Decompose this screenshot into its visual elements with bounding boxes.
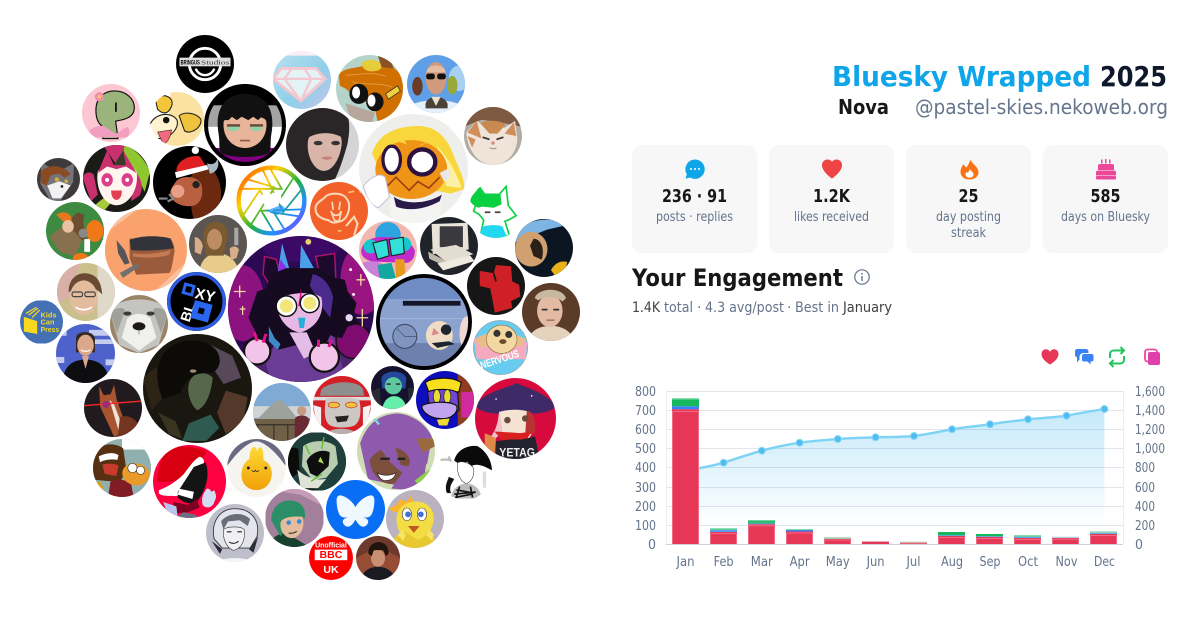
avatar: Bringus Studios logo: BRINGUS <box>181 60 200 67</box>
left axis labels: 300 <box>635 481 656 496</box>
bar: Oct <box>1014 535 1041 544</box>
avatar: rainbow camera aperture heart <box>236 166 307 236</box>
heading: Your Engagement: Your Engagement <box>631 264 843 292</box>
avatar: orange and white cat <box>464 107 522 165</box>
avatar: man with cap portrait <box>522 283 580 341</box>
right axis labels: 600 <box>1135 481 1155 496</box>
month labels: Aug <box>941 555 963 570</box>
avatar: pastel diamond <box>273 51 331 109</box>
avatar: red shape on black <box>467 257 525 315</box>
bar: Apr <box>786 529 813 544</box>
engagement summary text: total <box>664 300 693 316</box>
cumulative area <box>686 409 1104 544</box>
avatar: Kids Can Press logo: Press <box>41 325 59 334</box>
avatar: green haired character <box>265 489 324 547</box>
avatar: green skinned person <box>371 366 414 409</box>
avatar: Unofficial BBC UK: UK <box>323 564 339 576</box>
bar: Jul <box>900 542 927 544</box>
left axis labels: 800 <box>635 385 656 400</box>
avatar: purple dog with yellow hat <box>416 371 474 429</box>
user name and handle: @pastel-skies.nekoweb.org <box>915 95 1168 119</box>
icon: legend replies <box>1075 349 1094 364</box>
avatar: yellow bunny blob <box>227 439 286 497</box>
avatar: teal creature with diamond glasses <box>359 221 417 279</box>
month labels: Feb <box>714 555 734 570</box>
right axis labels: 1,200 <box>1135 423 1165 438</box>
icon: chat bubble <box>685 159 705 179</box>
avatar: cat girl on green <box>46 202 104 260</box>
avatar: space station porthole <box>376 274 472 370</box>
panel: posts and replies: 236 · 91 <box>662 186 727 207</box>
legend icons <box>1041 347 1160 367</box>
panel: day posting streak: day posting <box>936 210 1001 225</box>
engagement summary text <box>632 300 892 316</box>
stacked bars <box>672 398 1117 544</box>
avatar: horse with laser eyes <box>84 379 142 437</box>
month labels: Apr <box>790 555 810 570</box>
panel: day posting streak: streak <box>951 226 986 241</box>
month labels: Jun <box>866 555 885 570</box>
title: 2025 <box>1100 60 1167 93</box>
right axis labels <box>1135 385 1165 553</box>
left axis labels: 400 <box>635 461 656 476</box>
avatar: santa hat bull <box>153 146 226 219</box>
month labels: Oct <box>1018 555 1038 570</box>
panel: posts and replies <box>632 145 757 253</box>
icon: birthday cake <box>1096 159 1116 180</box>
avatar: main purple cat girl <box>228 236 374 382</box>
panel: days on Bluesky: 585 <box>1090 186 1120 207</box>
left axis labels: 0 <box>648 538 656 553</box>
right axis labels: 800 <box>1135 461 1155 476</box>
grid lines <box>666 391 1124 544</box>
avatar: Bloxy blue logo <box>167 272 226 331</box>
left axis labels <box>635 385 656 553</box>
icon: legend reposts <box>1110 347 1124 367</box>
engagement summary text: · <box>697 300 701 316</box>
icon: heart <box>822 159 842 178</box>
bar: Jan <box>672 398 699 544</box>
engagement summary text: January <box>842 300 892 316</box>
avatar: purple hair with green outline <box>357 412 435 490</box>
user name and handle: Nova <box>838 95 889 119</box>
title: Bluesky Wrapped <box>832 60 1091 93</box>
icon: legend like heart <box>1041 349 1059 364</box>
right axis labels: 0 <box>1135 538 1143 553</box>
avatar: Unofficial BBC UK: BBC <box>320 550 342 561</box>
avatar: green turtle on pink <box>82 84 140 142</box>
avatar: Bluesky butterfly <box>326 480 385 539</box>
avatar: woman in black at press wall <box>56 324 115 383</box>
avatar: Bringus Studios logo <box>176 35 234 93</box>
avatar bubble cloud <box>20 35 580 580</box>
avatar: peach satchel with sword <box>105 209 187 291</box>
avatar: anime girl with pink green hair <box>83 145 150 212</box>
month labels: Dec <box>1094 555 1115 570</box>
avatar: woman with glasses <box>57 263 115 321</box>
bar: May <box>824 537 851 544</box>
avatar: black and white manga sketch <box>438 443 492 500</box>
avatar: red and white robot demon <box>313 376 371 434</box>
panel: posts and replies: posts · replies <box>656 210 733 225</box>
avatar: brown mouth and Garfield <box>93 439 151 497</box>
avatar: Bloxy blue logo: XY <box>193 285 217 306</box>
month labels: Mar <box>751 555 773 570</box>
icon: flame <box>960 159 979 180</box>
left axis labels: 500 <box>635 442 656 457</box>
bar: Nov <box>1052 537 1079 544</box>
avatar: Nervous pug badge <box>473 320 528 375</box>
left axis labels: 600 <box>635 423 656 438</box>
avatar: pumpkin head with blonde hair <box>359 114 468 223</box>
engagement summary text: · <box>787 300 791 316</box>
icon: info <box>855 270 869 284</box>
bar: Dec <box>1090 531 1117 544</box>
avatar: wolf face <box>110 295 168 353</box>
avatar: man with raised hands <box>189 215 247 273</box>
panel: likes received: 1.2K <box>813 186 851 207</box>
avatar: old man with sunglasses <box>407 55 465 113</box>
right axis labels: 1,600 <box>1135 385 1165 400</box>
avatar: dark long-haired figure <box>143 334 252 443</box>
avatar: Unofficial BBC UK: Unofficial <box>315 542 347 549</box>
left axis labels: 700 <box>635 404 656 419</box>
avatar: brown haired wolf <box>37 158 80 201</box>
avatar: retro computer <box>420 217 478 275</box>
left axis labels: 100 <box>635 519 656 534</box>
avatar: mirror reflection photo <box>515 219 573 277</box>
avatar: Unofficial BBC UK <box>309 536 353 580</box>
left axis labels: 200 <box>635 500 656 515</box>
icon: legend quotes <box>1145 350 1160 365</box>
month labels: Sep <box>980 555 1000 570</box>
month labels: Nov <box>1056 555 1078 570</box>
panel: likes received: likes received <box>794 210 869 225</box>
avatar: yellow cartoon dog <box>150 92 204 146</box>
right axis labels: 200 <box>1135 519 1155 534</box>
avatar: hooded green glowing figure <box>288 432 346 491</box>
avatar: man at landscape overlook <box>253 383 311 441</box>
avatar: orange hair with glasses <box>336 55 403 122</box>
avatar: Kids Can Press logo: Can <box>41 318 54 327</box>
bar: Mar <box>748 520 775 544</box>
avatar: yellow chick <box>386 490 444 548</box>
cumulative line with points <box>686 406 1108 471</box>
avatar: red santa mascot with glove <box>153 445 226 518</box>
bar: Sep <box>976 534 1003 544</box>
avatar: Bringus Studios logo: Studios <box>201 60 230 67</box>
avatar: Kids Can Press logo: Kids <box>41 310 56 319</box>
avatar: pencil sketch face <box>206 504 264 562</box>
avatar: orange doodle cat <box>310 182 368 240</box>
month labels <box>676 555 1115 570</box>
panel: days on Bluesky <box>1043 145 1168 253</box>
month labels: Jul <box>906 555 920 570</box>
engagement summary text: Best in <box>795 300 839 316</box>
engagement summary text: 1.4K <box>632 300 661 316</box>
panel: day posting streak <box>906 145 1031 253</box>
avatar: asexual flag goth girl <box>204 84 286 166</box>
avatar: man in dune landscape <box>356 536 400 580</box>
bar: Feb <box>710 528 737 544</box>
right axis labels: 1,400 <box>1135 404 1165 419</box>
bar: Jun <box>862 541 889 544</box>
panel: day posting streak: 25 <box>958 186 978 207</box>
month labels: May <box>826 555 850 570</box>
avatar: green cat boy line art <box>470 184 518 238</box>
right axis labels: 400 <box>1135 500 1155 515</box>
bar: Aug <box>938 532 965 544</box>
month labels: Jan <box>676 555 694 570</box>
avatar: Bloxy blue logo: BL <box>178 301 199 324</box>
panel: likes received <box>769 145 894 253</box>
avatar: dark haired woman <box>286 108 359 181</box>
engagement summary text: 4.3 avg/post <box>705 300 784 316</box>
right axis labels: 1,000 <box>1135 442 1165 457</box>
panel: days on Bluesky: days on Bluesky <box>1061 210 1150 225</box>
chart: monthly engagement <box>635 385 1165 570</box>
avatar: witch hat girl <box>475 378 556 459</box>
avatar: Kids Can Press logo <box>20 300 63 344</box>
